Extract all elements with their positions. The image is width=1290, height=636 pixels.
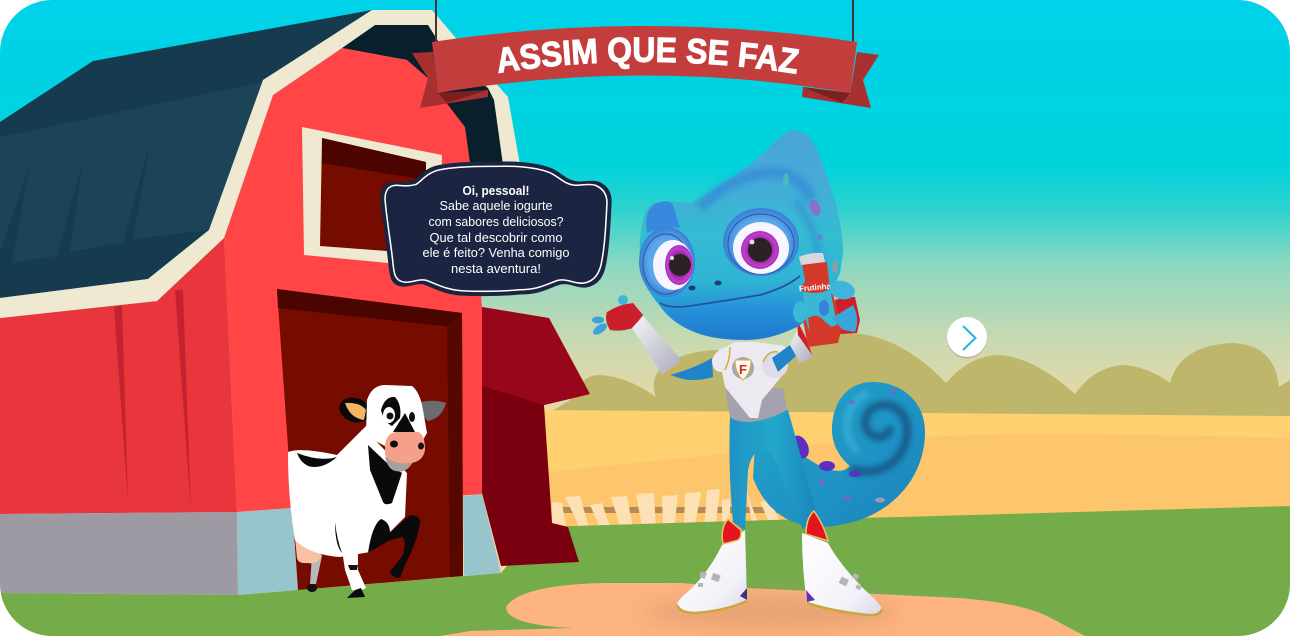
chameleon: head: [639, 130, 843, 340]
bubble text: ele é feito? Venha comigo: [422, 246, 570, 260]
barn: hayloft window: [302, 127, 442, 263]
chameleon: back arm: [591, 295, 713, 380]
distant hills: [544, 333, 1290, 416]
chameleon: torso suit: F: [739, 362, 747, 377]
cow: [288, 385, 446, 598]
speech bubble: [382, 163, 610, 295]
fence: [552, 489, 872, 532]
chameleon: legs: [729, 410, 816, 530]
banner: main ribbon: [432, 26, 857, 93]
chameleon: hand on bottle: [793, 278, 857, 332]
bubble text: nesta aventura!: [451, 262, 541, 276]
yogurt bottle: [799, 253, 842, 347]
chameleon: boots: [677, 511, 882, 615]
chameleon: arm holding bottle: [772, 297, 860, 372]
wheat field: [544, 410, 1290, 530]
chameleon: brow: [646, 201, 680, 233]
bubble text: Oi, pessoal!: [462, 184, 530, 198]
chameleon: nostrils and mouth: [660, 276, 800, 307]
cow: back leg: [342, 550, 366, 598]
barn: gable behind red wall: [372, 10, 520, 200]
barn: front wall: [224, 48, 482, 512]
chameleon: tail: [753, 382, 925, 527]
cow: body: [288, 425, 407, 557]
chameleon: left eye: [639, 227, 695, 297]
yogurt bottle: Frutinha: [799, 282, 832, 293]
cow: head: [336, 385, 446, 472]
banner: title text: ASSIM QUE SE FAZ: [498, 37, 800, 74]
barn: side wing: [482, 307, 590, 566]
chameleon: torso suit: [712, 342, 788, 422]
chameleon character: [591, 130, 925, 615]
cow: front raised leg: [368, 515, 420, 578]
barn: side wall: [0, 238, 237, 514]
barn: roof trim: [0, 10, 432, 318]
barn: stone base: [0, 494, 501, 595]
bubble text: [422, 184, 570, 276]
barn: door: [277, 289, 463, 590]
cow: rear leg and udder: [295, 538, 322, 592]
banner: ribbon tails: [412, 52, 879, 108]
bubble text: com sabores deliciosos?: [428, 215, 564, 229]
dirt path: [440, 583, 1085, 636]
bubble text: Que tal descobrir como: [430, 231, 563, 245]
grass: [0, 506, 1290, 636]
title banner: [412, 0, 879, 108]
banner: ropes: [436, 0, 853, 42]
bubble text: Sabe aquele iogurte: [440, 199, 553, 213]
barn: roof: [0, 10, 372, 298]
next arrow button: [947, 317, 987, 358]
cow: patches: [297, 445, 402, 553]
chameleon: right eye: [723, 208, 799, 276]
red barn: [0, 10, 590, 595]
